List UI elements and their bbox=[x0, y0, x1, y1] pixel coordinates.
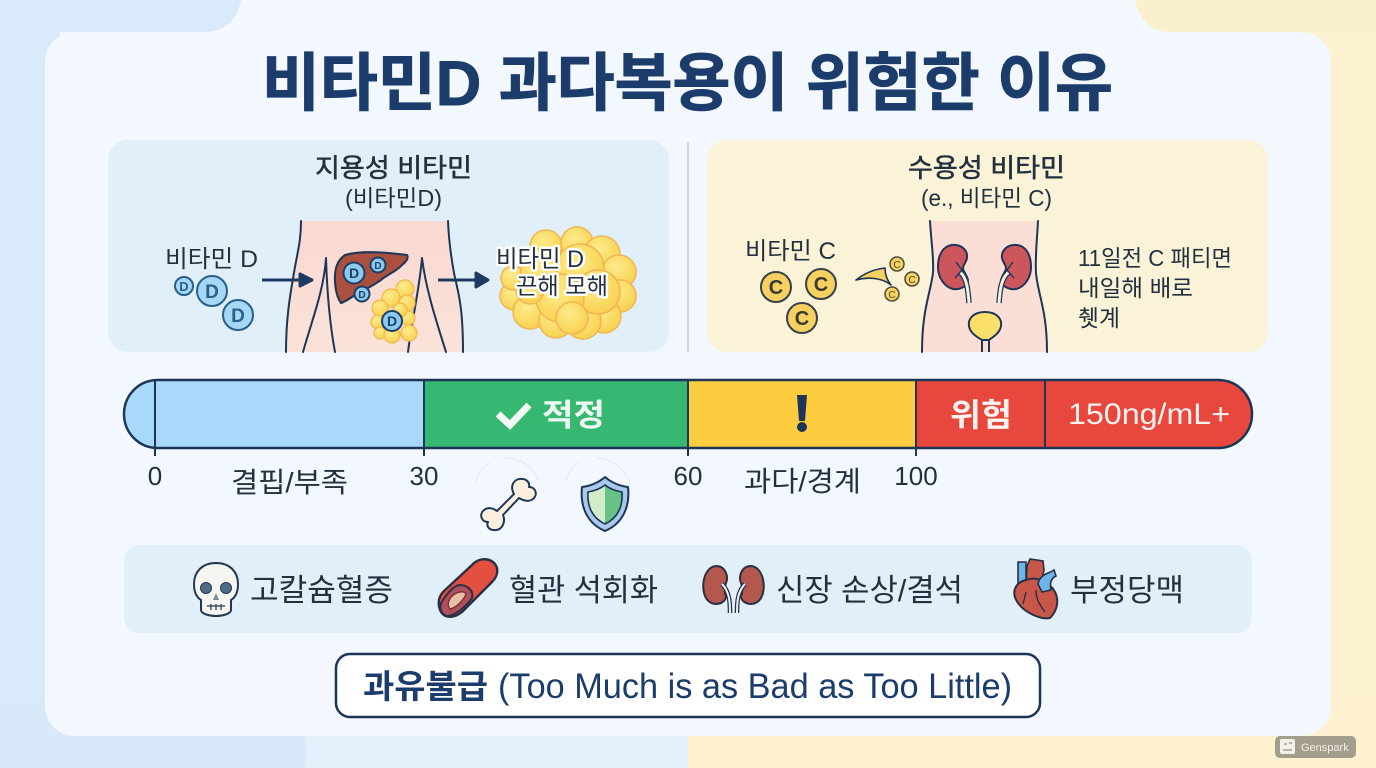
text: excreted note: 췟계 bbox=[1078, 305, 1120, 331]
label: hypercalcemia: 고칼슘혈증 bbox=[250, 573, 393, 608]
label: kidney damage: 신장 손상/결석 bbox=[776, 573, 963, 608]
scale labels: 60 bbox=[674, 461, 702, 491]
icon: calcified blood vessel bbox=[439, 559, 497, 617]
scale labels: 100 bbox=[894, 461, 938, 491]
icon: fat cluster bbox=[500, 227, 636, 339]
watermark: Genspark bbox=[1301, 742, 1349, 754]
fat cells in abdomen bbox=[371, 280, 417, 343]
label: stored in fat: 비타민 D bbox=[496, 246, 584, 273]
icon: excreted vitamin C particles: C bbox=[893, 260, 901, 271]
body illustration with liver and fat: D bbox=[387, 313, 397, 329]
icon: check mark bbox=[498, 405, 529, 425]
panel: water-soluble vitamin bbox=[707, 140, 1268, 352]
segment: optimal bbox=[424, 380, 688, 448]
label: danger: 위험 bbox=[950, 397, 1012, 433]
icon: shield bbox=[582, 477, 628, 531]
watermark bbox=[1275, 736, 1356, 758]
vitamin D molecules on organs bbox=[344, 258, 402, 331]
icon: heart bbox=[1014, 559, 1057, 618]
text: excreted note: 11일전 C 패티면 bbox=[1078, 245, 1232, 271]
callout: too much is as bad as too little: 과유불급 bbox=[363, 668, 488, 705]
arrow: into the body bbox=[262, 274, 312, 286]
kidneys bbox=[938, 245, 968, 289]
subheading: vitamin D: (비타민D) bbox=[345, 185, 442, 211]
label: stored in fat: 끈해 모해 bbox=[516, 273, 608, 299]
scale bar bbox=[124, 380, 1252, 456]
heading: fat-soluble: 지용성 비타민 bbox=[315, 153, 472, 183]
heading: water-soluble: 수용성 비타민 bbox=[908, 153, 1065, 183]
scale labels: 0 bbox=[148, 461, 162, 491]
icon: vitamin D molecules bbox=[175, 276, 253, 330]
label: arrhythmia: 부정당맥 bbox=[1070, 573, 1184, 608]
scale labels: 결핍/부족 bbox=[231, 467, 348, 498]
scale labels bbox=[148, 461, 938, 498]
label: stored in fat bbox=[496, 246, 608, 299]
icon: vitamin D molecules: D bbox=[205, 282, 219, 303]
text: excreted note bbox=[1078, 245, 1232, 331]
icon: vitamin D molecules: D bbox=[179, 279, 189, 294]
body illustration with liver and fat bbox=[286, 221, 463, 352]
scale labels: 과다/경계 bbox=[744, 466, 861, 497]
icon: skull bbox=[194, 563, 238, 616]
text: excreted note: 내일해 배로 bbox=[1078, 275, 1193, 301]
icon: bone bbox=[476, 458, 628, 530]
panel: fat-soluble vitamin bbox=[108, 140, 669, 352]
body illustration with liver and fat: D bbox=[374, 261, 382, 272]
segment: excess bbox=[688, 380, 916, 448]
segment: deficient bbox=[124, 380, 424, 448]
icon: excreted vitamin C particles bbox=[856, 257, 919, 301]
label: 150 ng/mL: 150ng/mL+ bbox=[1068, 398, 1230, 431]
arrow: to fat storage bbox=[438, 273, 488, 287]
bladder bbox=[969, 312, 1001, 340]
label: vitamin D: 비타민 D bbox=[165, 246, 258, 273]
icon: vitamin C molecules: C bbox=[814, 274, 828, 296]
icon: kidneys bbox=[703, 566, 764, 613]
liver bbox=[335, 252, 408, 303]
icon: excreted vitamin C particles: C bbox=[888, 290, 896, 301]
segment: danger bbox=[916, 380, 1252, 448]
icon: exclamation mark bbox=[797, 395, 807, 432]
label: vascular calcification: 혈관 석회화 bbox=[509, 573, 658, 608]
icon: vitamin C molecules: C bbox=[795, 308, 809, 330]
callout: too much is as bad as too little bbox=[336, 654, 1040, 717]
icon: excreted vitamin C particles: C bbox=[908, 275, 916, 286]
icon: vitamin C molecules bbox=[761, 269, 836, 333]
panel: risks bbox=[124, 545, 1252, 633]
divider bbox=[687, 142, 689, 352]
body illustration with liver and fat: D bbox=[358, 290, 366, 301]
label: vitamin C: 비타민 C bbox=[745, 238, 836, 265]
title: 비타민D 과다복용이 위험한 이유 bbox=[262, 49, 1113, 119]
scale labels: 30 bbox=[410, 461, 438, 491]
icon: vitamin C molecules: C bbox=[769, 277, 783, 299]
label: optimal: 적정 bbox=[542, 398, 605, 433]
body illustration with liver and fat: D bbox=[349, 265, 359, 281]
callout: too much is as bad as too little: (Too Much is as Bad as Too Little) bbox=[498, 667, 1012, 706]
body illustration with kidneys bbox=[922, 221, 1047, 352]
subheading: vitamin C example: (e., 비타민 C) bbox=[921, 185, 1052, 211]
icon: vitamin D molecules: D bbox=[231, 306, 245, 327]
